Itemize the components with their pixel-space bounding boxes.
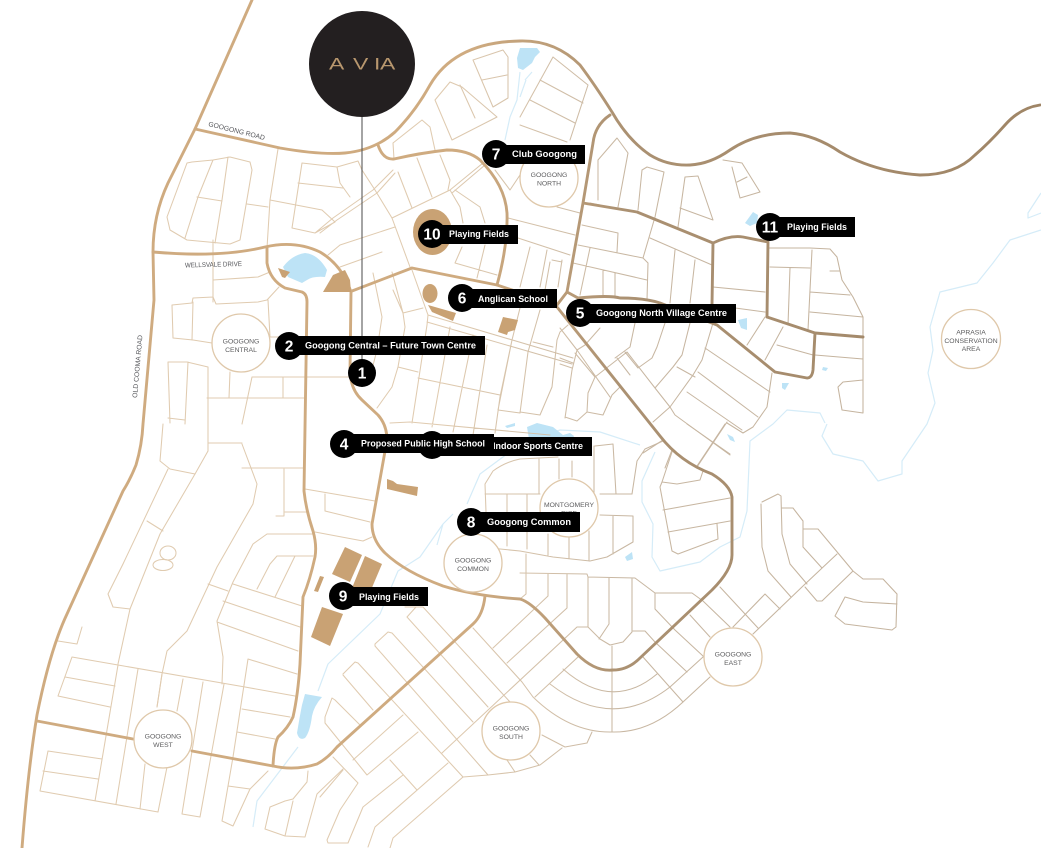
site: village block [498, 317, 518, 335]
precinct: Googong East [704, 628, 762, 686]
precinct: Googong Common: GOOGONG [455, 558, 491, 564]
label 4: Proposed Public High School [330, 430, 494, 458]
precinct: Montgomery Rise: RISE [561, 510, 577, 517]
precinct: Googong North [520, 149, 578, 207]
label 11: Playing Fields: 11 [762, 220, 779, 236]
label 2: Googong Central [275, 332, 485, 360]
AVIA logo marker and leader line: AVIA [329, 55, 396, 74]
road name: Wellsvale Drive: WELLSVALE DRIVE [185, 261, 242, 269]
precinct: Aprasia Conservation Area [942, 310, 1000, 368]
label 4: Proposed Public High School: 4 [340, 436, 349, 454]
precinct: Montgomery Rise [540, 479, 598, 537]
label 7: Club Googong: 7 [492, 146, 500, 164]
road: central connector [352, 268, 557, 305]
label 3: Indoor Sports Centre: 3 [428, 438, 437, 454]
site: Anglican School oval [422, 284, 438, 303]
precinct: Googong Common: COMMON [457, 566, 489, 573]
road: northern ring [378, 145, 507, 285]
road name: Old Cooma Road: OLD COOMA ROAD [132, 335, 144, 398]
site: Anglican School building [428, 305, 456, 321]
precinct: Aprasia Conservation Area: AREA [962, 346, 981, 353]
site: Playing Fields 10 oval [413, 209, 452, 255]
precinct: Googong West: GOOGONG [145, 734, 181, 740]
precinct: Googong Central [212, 314, 270, 372]
label 11: Playing Fields [756, 213, 855, 241]
label 8: Googong Common: Googong Common [487, 517, 571, 528]
water: creeks and ponds [253, 48, 1041, 827]
precinct: Googong Central: GOOGONG [223, 338, 259, 346]
label 6: Anglican School: 6 [458, 290, 467, 308]
marker 1 [348, 359, 376, 387]
label 5: Googong North Village Centre: 5 [576, 306, 585, 322]
road: north-east ring [567, 115, 863, 378]
label 2: Googong Central: Googong Central – Future Town Centre [305, 340, 476, 352]
site: Playing Fields 9 north-east pitch [352, 556, 382, 597]
sites: tan feature areas [278, 209, 518, 646]
road: southern arterial [37, 596, 485, 768]
minor streets [40, 50, 897, 848]
road: Wellsvale Drive and central loop [153, 244, 732, 670]
label 2: Googong Central: 2 [285, 338, 293, 356]
precinct: Googong Common [444, 534, 502, 592]
label 5: Googong North Village Centre: Googong North Village Centre [596, 308, 727, 319]
precinct: Googong West [134, 710, 192, 768]
site: Playing Fields 9 south pitch [311, 607, 343, 646]
precinct: Googong South: GOOGONG [493, 726, 529, 732]
label 5: Googong North Village Centre [566, 299, 736, 327]
road: Googong Road [195, 41, 1040, 175]
precinct: Aprasia Conservation Area: CONSERVATION [944, 338, 998, 345]
label 9: Playing Fields: Playing Fields [359, 592, 419, 603]
precinct: Googong South [482, 702, 540, 760]
label 9: Playing Fields: 9 [339, 588, 348, 606]
label 11: Playing Fields: Playing Fields [787, 222, 847, 233]
precinct: Aprasia Conservation Area: APRASIA [956, 330, 986, 336]
label 10: Playing Fields [418, 220, 518, 248]
precinct: Googong Central: CENTRAL [225, 347, 257, 354]
site: small lakeside block [278, 268, 290, 278]
precinct: Googong South: SOUTH [499, 734, 523, 741]
site: Playing Fields 9 pavilion [314, 576, 324, 592]
label 10: Playing Fields: Playing Fields [449, 229, 509, 240]
road: western spine [267, 248, 316, 766]
label 7: Club Googong [482, 140, 585, 168]
precinct: Googong North: NORTH [537, 180, 561, 188]
label 3: Indoor Sports Centre [418, 431, 592, 459]
label 7: Club Googong: Club Googong [512, 149, 577, 160]
label 8: Googong Common: 8 [467, 514, 476, 532]
label 4: Proposed Public High School: Proposed Public High School [361, 438, 485, 450]
site: proposed high school block [387, 479, 418, 496]
precinct: Googong East: EAST [724, 660, 742, 667]
precinct: Googong West: WEST [153, 742, 173, 749]
marker 1: 1 [358, 366, 367, 382]
road: Old Cooma Road [22, 0, 252, 848]
site: civic block by lake [323, 270, 351, 292]
precinct: Montgomery Rise: MONTGOMERY [544, 502, 595, 509]
label 10: Playing Fields: 10 [423, 226, 441, 244]
precinct: Googong North: GOOGONG [531, 172, 567, 179]
label 9: Playing Fields [329, 582, 428, 610]
label 6: Anglican School [448, 284, 557, 312]
site: Playing Fields 9 north-west pitch [332, 547, 362, 582]
precinct: Googong East: GOOGONG [715, 652, 751, 658]
label 8: Googong Common [457, 508, 580, 536]
AVIA logo marker and leader line [309, 11, 415, 373]
label 3: Indoor Sports Centre: Indoor Sports Centre [493, 441, 583, 452]
road name: Googong Road: GOOGONG ROAD [208, 121, 266, 142]
label 6: Anglican School: Anglican School [478, 294, 548, 305]
